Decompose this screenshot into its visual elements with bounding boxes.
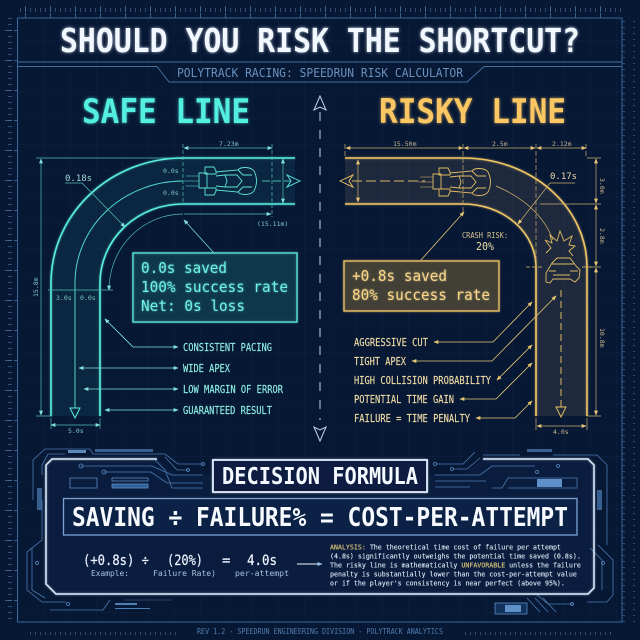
risky callout: 80% success rate	[352, 286, 490, 304]
risky track	[340, 158, 587, 417]
worked example: =	[222, 553, 230, 569]
risky dimension labels: 3.0m	[598, 178, 606, 194]
crash risk: CRASH RISK:	[462, 231, 508, 240]
safe labels with arrows: GUARANTEED RESULT	[183, 405, 273, 417]
safe labels with arrows: LOW MARGIN OF ERROR	[183, 384, 284, 396]
panel: risky line diagram	[340, 140, 606, 436]
safe car	[184, 167, 256, 195]
risky labels with arrows: AGGRESSIVE CUT	[354, 337, 429, 349]
risky dimension labels: 2.5m	[492, 140, 508, 148]
risky labels with arrows: TIGHT APEX	[354, 356, 407, 368]
circuit decoration	[27, 449, 613, 612]
safe dimension labels: (15.11m)	[257, 220, 288, 228]
worked example: (20%)	[167, 553, 203, 569]
worked example: Example:	[91, 569, 129, 578]
heading: safe line: SAFE LINE	[82, 92, 250, 132]
risky callout: +0.8s saved	[352, 267, 447, 285]
panel: safe line diagram	[32, 140, 300, 435]
risky dimension labels: 10.8m	[598, 328, 606, 348]
risky car	[418, 168, 490, 196]
safe dimensions	[36, 144, 283, 429]
risky dimension labels: 2.8m	[598, 228, 606, 244]
safe track	[51, 158, 300, 418]
risky dimension labels: 2.12m	[552, 140, 572, 148]
safe dimension labels: 0.18s	[65, 174, 92, 184]
crash risk: 20%	[476, 241, 495, 253]
panel: decision formula	[27, 449, 613, 614]
safe dimension labels	[32, 140, 288, 435]
risky callout	[344, 212, 499, 311]
worked example: 4.0s	[247, 553, 277, 569]
title: SHOULD YOU RISK THE SHORTCUT?	[60, 21, 580, 60]
safe callout	[133, 220, 297, 322]
worked example	[83, 553, 322, 578]
safe callout: 100% success rate	[141, 278, 288, 296]
worked example: per-attempt	[235, 569, 289, 578]
risky labels with arrows: POTENTIAL TIME GAIN	[354, 394, 454, 406]
safe dimension labels: 15.8m	[32, 277, 40, 297]
analysis text: penalty is substantially lower than the cost-per-attempt value	[330, 570, 577, 579]
risky dimension labels	[393, 140, 606, 436]
safe labels with arrows	[79, 319, 284, 417]
subtitle: POLYTRACK RACING: SPEEDRUN RISK CALCULATOR	[177, 65, 463, 80]
risky dimension labels: 4.0s	[553, 428, 569, 436]
crash car and burst	[526, 231, 592, 283]
safe callout: 0.0s saved	[141, 259, 227, 277]
center divider with arrows	[314, 96, 326, 441]
risky labels with arrows: FAILURE = TIME PENALTY	[354, 413, 471, 425]
safe dimension labels: 5.0s	[68, 427, 84, 435]
worked example: Failure Rate)	[153, 569, 216, 578]
risky labels with arrows: HIGH COLLISION PROBABILITY	[354, 375, 492, 387]
formula panel border	[46, 459, 594, 594]
risky dimension labels: 0.17s	[550, 172, 577, 182]
heading: risky line: RISKY LINE	[379, 92, 566, 132]
formula bar: SAVING ÷ FAILURE% = COST-PER-ATTEMPT	[72, 503, 568, 533]
safe dimension labels: 0.0s	[163, 167, 179, 175]
safe dimension labels: 0.0s	[80, 294, 96, 302]
safe dimension labels: 0.0s	[163, 189, 179, 197]
analysis text: (4.8s) significantly outweighs the potential time saved (0.8s).	[330, 552, 581, 561]
safe labels with arrows: WIDE APEX	[183, 363, 231, 375]
risky labels with arrows	[354, 296, 556, 425]
formula panel background	[46, 459, 594, 594]
worked example: (+0.8s) ÷	[83, 553, 149, 569]
analysis text: or if the player's consistency is near perfect (above 95%).	[330, 579, 565, 588]
analysis text: ANALYSIS: The theoretical time cost of failure per attempt	[330, 543, 561, 552]
analysis text: The risky line is mathematically UNFAVORABLE unless the failure	[330, 561, 581, 570]
risky dimension labels: 15.50m	[393, 140, 417, 148]
safe dimension labels: 3.0s	[56, 294, 72, 302]
risky dimensions	[345, 144, 601, 430]
footer text: REV 1.2 - SPEEDRUN ENGINEERING DIVISION - POLYTRACK ANALYTICS	[197, 627, 443, 636]
safe labels with arrows: CONSISTENT PACING	[183, 342, 272, 354]
crash risk	[462, 231, 508, 253]
safe callout: Net: 0s loss	[141, 297, 245, 315]
safe dimension labels: 7.23m	[219, 140, 239, 148]
analysis text	[330, 543, 581, 588]
heading: decision formula: DECISION FORMULA	[222, 464, 418, 490]
circuit nodes and small gauges	[36, 449, 604, 614]
